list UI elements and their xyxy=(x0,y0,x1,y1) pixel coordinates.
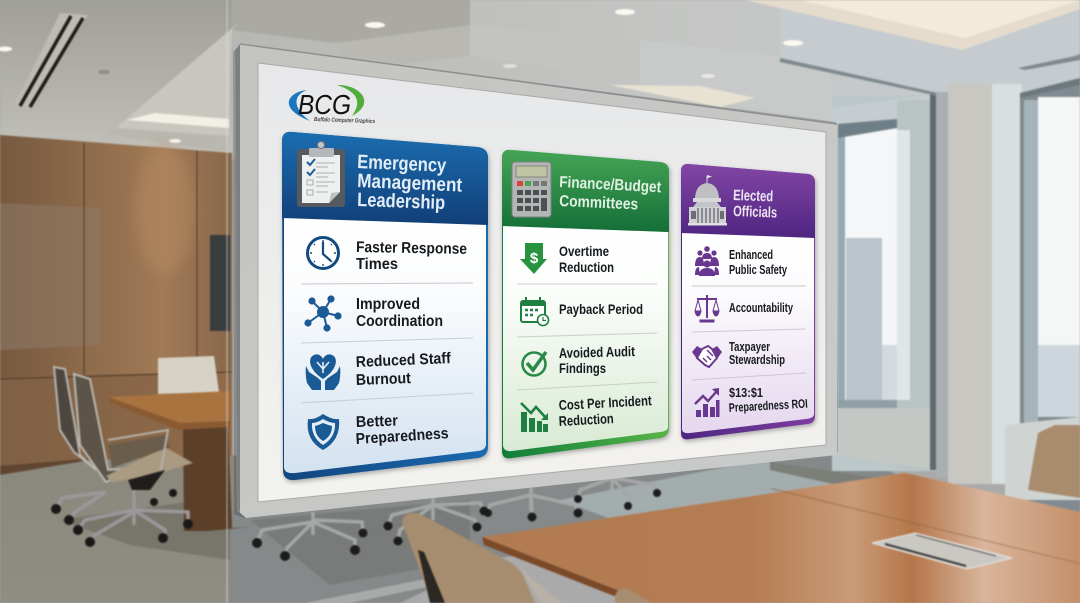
logo: BCG Buffalo Computer Graphics: BCG xyxy=(298,89,351,120)
item: Cost Per Incident Reduction xyxy=(521,392,652,432)
item: $13:$1 Preparedness ROI: Preparedness ROI xyxy=(728,397,808,415)
right chair xyxy=(1028,425,1080,498)
icon: calculator xyxy=(512,162,551,217)
item: Cost Per Incident Reduction: Reduction xyxy=(558,410,614,429)
heading: Finance/Budget Committees: Committees xyxy=(559,193,639,213)
floor behind board xyxy=(230,450,910,603)
item: Avoided Audit Findings xyxy=(522,343,635,376)
white chair xyxy=(158,356,219,394)
item: Faster Response Times: Times xyxy=(356,256,398,273)
right wall column xyxy=(948,78,1080,603)
heading: Finance/Budget Committees xyxy=(559,174,662,213)
icon: clipboard xyxy=(297,142,345,207)
item: Overtime Reduction: Reduction xyxy=(559,259,614,275)
item: Faster Response Times xyxy=(308,238,468,273)
item: Better Preparedness: Better xyxy=(356,413,398,431)
office chair back xyxy=(51,367,193,547)
header band xyxy=(502,150,669,232)
item: Reduced Staff Burnout xyxy=(306,350,452,390)
item: Reduced Staff Burnout: Reduced Staff xyxy=(355,350,452,371)
item: Better Preparedness: Preparedness xyxy=(355,425,449,448)
heading: Emergency Management Leadership: Management xyxy=(357,170,463,197)
item: Avoided Audit Findings: Findings xyxy=(559,360,606,376)
item: Improved Coordination: Improved xyxy=(356,296,420,313)
item: Better Preparedness xyxy=(308,413,449,450)
item: Payback Period: Payback Period xyxy=(559,301,643,317)
ceiling lights xyxy=(0,9,803,143)
item: Taxpayer Stewardship: Stewardship xyxy=(729,353,785,367)
heading: Emergency Management Leadership xyxy=(357,151,463,214)
heading: Emergency Management Leadership: Leadership xyxy=(357,189,446,214)
item: Taxpayer Stewardship xyxy=(692,340,785,367)
wall screen xyxy=(210,235,230,331)
heading: Elected Officials xyxy=(733,187,777,222)
ceiling vent xyxy=(14,13,1080,108)
item: Faster Response Times: Faster Response xyxy=(356,239,468,258)
item: Overtime Reduction xyxy=(520,243,614,275)
carpet floor xyxy=(0,455,250,603)
item: Overtime Reduction: Overtime xyxy=(559,243,609,259)
icon: capitol building xyxy=(688,175,727,226)
item: Accountability: Accountability xyxy=(729,301,793,315)
item: Accountability xyxy=(695,295,793,322)
logo: BCG Buffalo Computer Graphics: Buffalo Computer Graphics xyxy=(314,117,376,125)
item: Improved Coordination: Coordination xyxy=(356,313,443,330)
item: Enhanced Public Safety xyxy=(695,246,787,277)
item: Enhanced Public Safety: Enhanced xyxy=(729,248,773,262)
item: Cost Per Incident Reduction: Cost Per Incident xyxy=(558,392,652,413)
heading: Elected Officials: Elected xyxy=(733,187,773,205)
item: Reduced Staff Burnout: Burnout xyxy=(356,370,411,389)
heading: Elected Officials: Officials xyxy=(733,203,777,222)
heading: Finance/Budget Committees: Finance/Budget xyxy=(559,174,662,196)
right glass wall and window xyxy=(770,58,948,490)
panel: Elected Officials xyxy=(681,164,815,439)
left table xyxy=(108,391,230,430)
glass edge line xyxy=(226,0,228,603)
heading: Emergency Management Leadership: Emergency xyxy=(357,151,447,177)
wood wall xyxy=(0,135,232,475)
conference table xyxy=(482,473,1080,603)
whiteboard frame xyxy=(233,44,838,518)
header band xyxy=(681,164,815,238)
left table base xyxy=(183,425,250,531)
chair bases under board xyxy=(257,472,657,555)
item: Payback Period xyxy=(521,297,643,326)
item: Taxpayer Stewardship: Taxpayer xyxy=(729,340,770,354)
item: $13:$1 Preparedness ROI: $13:$1 xyxy=(729,386,763,400)
panel: Emergency Management Leadership xyxy=(282,132,488,480)
item: Enhanced Public Safety: Public Safety xyxy=(729,263,787,277)
item: Avoided Audit Findings: Avoided Audit xyxy=(559,343,635,361)
logo: BCG Buffalo Computer Graphics xyxy=(289,85,376,125)
panel: Finance/Budget Committees xyxy=(502,150,669,458)
ceiling xyxy=(0,0,1080,160)
front chair xyxy=(402,513,652,603)
header band xyxy=(282,132,488,225)
ceiling soffit light xyxy=(105,0,1080,152)
item: Improved Coordination xyxy=(305,296,443,331)
item: Overtime Reduction: $ xyxy=(530,250,539,267)
item: $13:$1 Preparedness ROI xyxy=(695,386,808,417)
table cable box xyxy=(872,533,1012,569)
